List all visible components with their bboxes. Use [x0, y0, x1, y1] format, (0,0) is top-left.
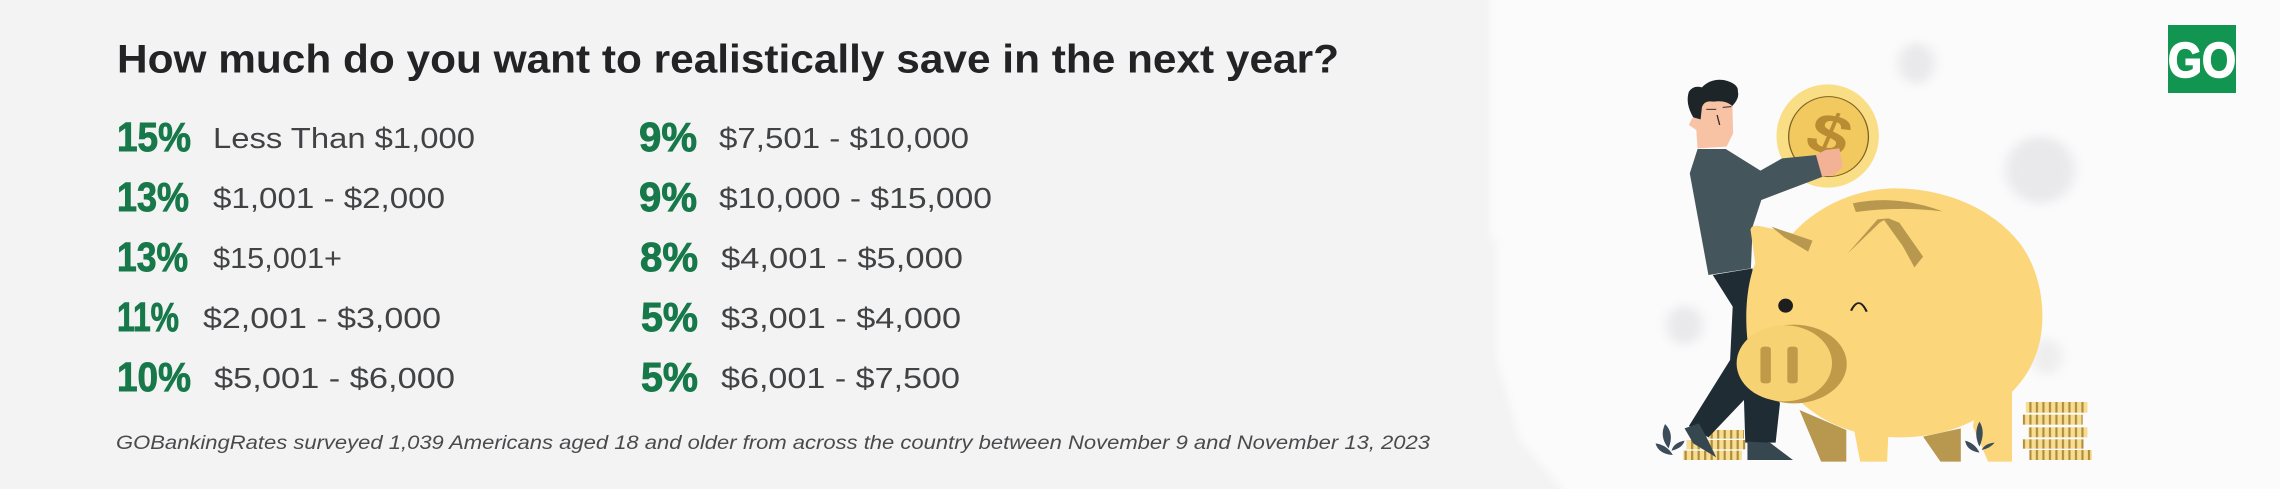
coin in hand: $ — [1797, 99, 1862, 169]
row: 15% less than $1,000: 15% — [117, 114, 191, 160]
row: 13% $15,001+ — [117, 234, 342, 280]
row: 13% $1,001 - $2,000: 13% — [117, 174, 189, 220]
row: 8% $4,001 - $5,000: 8% — [640, 234, 698, 280]
right ear — [1847, 218, 1923, 267]
hair — [1688, 80, 1738, 119]
shoes — [1685, 423, 1716, 457]
row: 10% $5,001 - $6,000: $5,001 - $6,000 — [214, 363, 455, 395]
front legs — [1852, 417, 1888, 462]
blurred background coins — [1666, 43, 2075, 375]
icon: left plant — [1656, 424, 1685, 455]
row: 11% $2,001 - $3,000: $2,001 - $3,000 — [203, 303, 441, 335]
row: 8% $4,001 - $5,000 — [640, 234, 963, 280]
row: 13% $1,001 - $2,000 — [117, 174, 445, 220]
logo: GO: GO — [2168, 34, 2236, 88]
icon: right plant — [1965, 422, 1995, 453]
snout — [1737, 325, 1847, 403]
head — [1689, 100, 1733, 148]
row: 5% $3,001 - $4,000 — [641, 294, 961, 340]
footnote: GOBankingRates surveyed 1,039 Americans aged 18 and older from across the country between November 9 and November 13, 2023 — [116, 433, 1431, 454]
row: 13% $1,001 - $2,000: $1,001 - $2,000 — [213, 183, 445, 215]
row: 5% $6,001 - $7,500 — [641, 354, 960, 400]
trousers — [1689, 268, 1780, 443]
row: 9% $10,000 - $15,000: 9% — [639, 174, 697, 220]
row: 9% $10,000 - $15,000: $10,000 - $15,000 — [719, 183, 992, 215]
row: 15% less than $1,000: Less Than $1,000 — [213, 123, 475, 155]
left ear band — [1771, 227, 1812, 252]
row: 9% $7,501 - $10,000 — [639, 114, 969, 160]
back legs — [1799, 410, 1846, 462]
left column of results — [117, 114, 475, 400]
face details — [1706, 107, 1731, 125]
icon: right coin stack — [2023, 402, 2092, 460]
row: 5% $3,001 - $4,000: 5% — [641, 294, 698, 340]
row: 15% less than $1,000 — [117, 114, 475, 160]
icon: left coin stack — [1683, 430, 1745, 460]
hand — [1816, 148, 1843, 177]
row: 13% $15,001+: $15,001+ — [213, 243, 342, 275]
row: 11% $2,001 - $3,000: 11% — [117, 294, 179, 340]
coin in hand — [1777, 84, 1879, 188]
row: 5% $3,001 - $4,000: $3,001 - $4,000 — [721, 303, 961, 335]
row: 9% $7,501 - $10,000: $7,501 - $10,000 — [719, 123, 969, 155]
wink — [1851, 303, 1867, 312]
row: 11% $2,001 - $3,000 — [117, 294, 441, 340]
piggy bank — [1737, 188, 2042, 462]
row: 8% $4,001 - $5,000: $4,001 - $5,000 — [721, 243, 963, 275]
coin slot — [1853, 200, 1943, 212]
title: How much do you want to realistically save in the next year? — [117, 38, 1339, 82]
row: 9% $7,501 - $10,000: 9% — [639, 114, 697, 160]
man — [1685, 80, 1879, 460]
illustration: man and piggy bank — [1656, 43, 2092, 462]
row: 5% $6,001 - $7,500: $6,001 - $7,500 — [721, 363, 960, 395]
panel: left background — [0, 0, 1580, 489]
row: 10% $5,001 - $6,000: 10% — [117, 354, 191, 400]
shirt — [1690, 149, 1823, 275]
row: 5% $6,001 - $7,500: 5% — [641, 354, 698, 400]
eye — [1778, 299, 1793, 313]
row: 13% $15,001+: 13% — [117, 234, 188, 280]
row: 9% $10,000 - $15,000 — [639, 174, 992, 220]
right column of results — [639, 114, 992, 400]
row: 10% $5,001 - $6,000 — [117, 354, 455, 400]
body — [1746, 188, 2042, 437]
